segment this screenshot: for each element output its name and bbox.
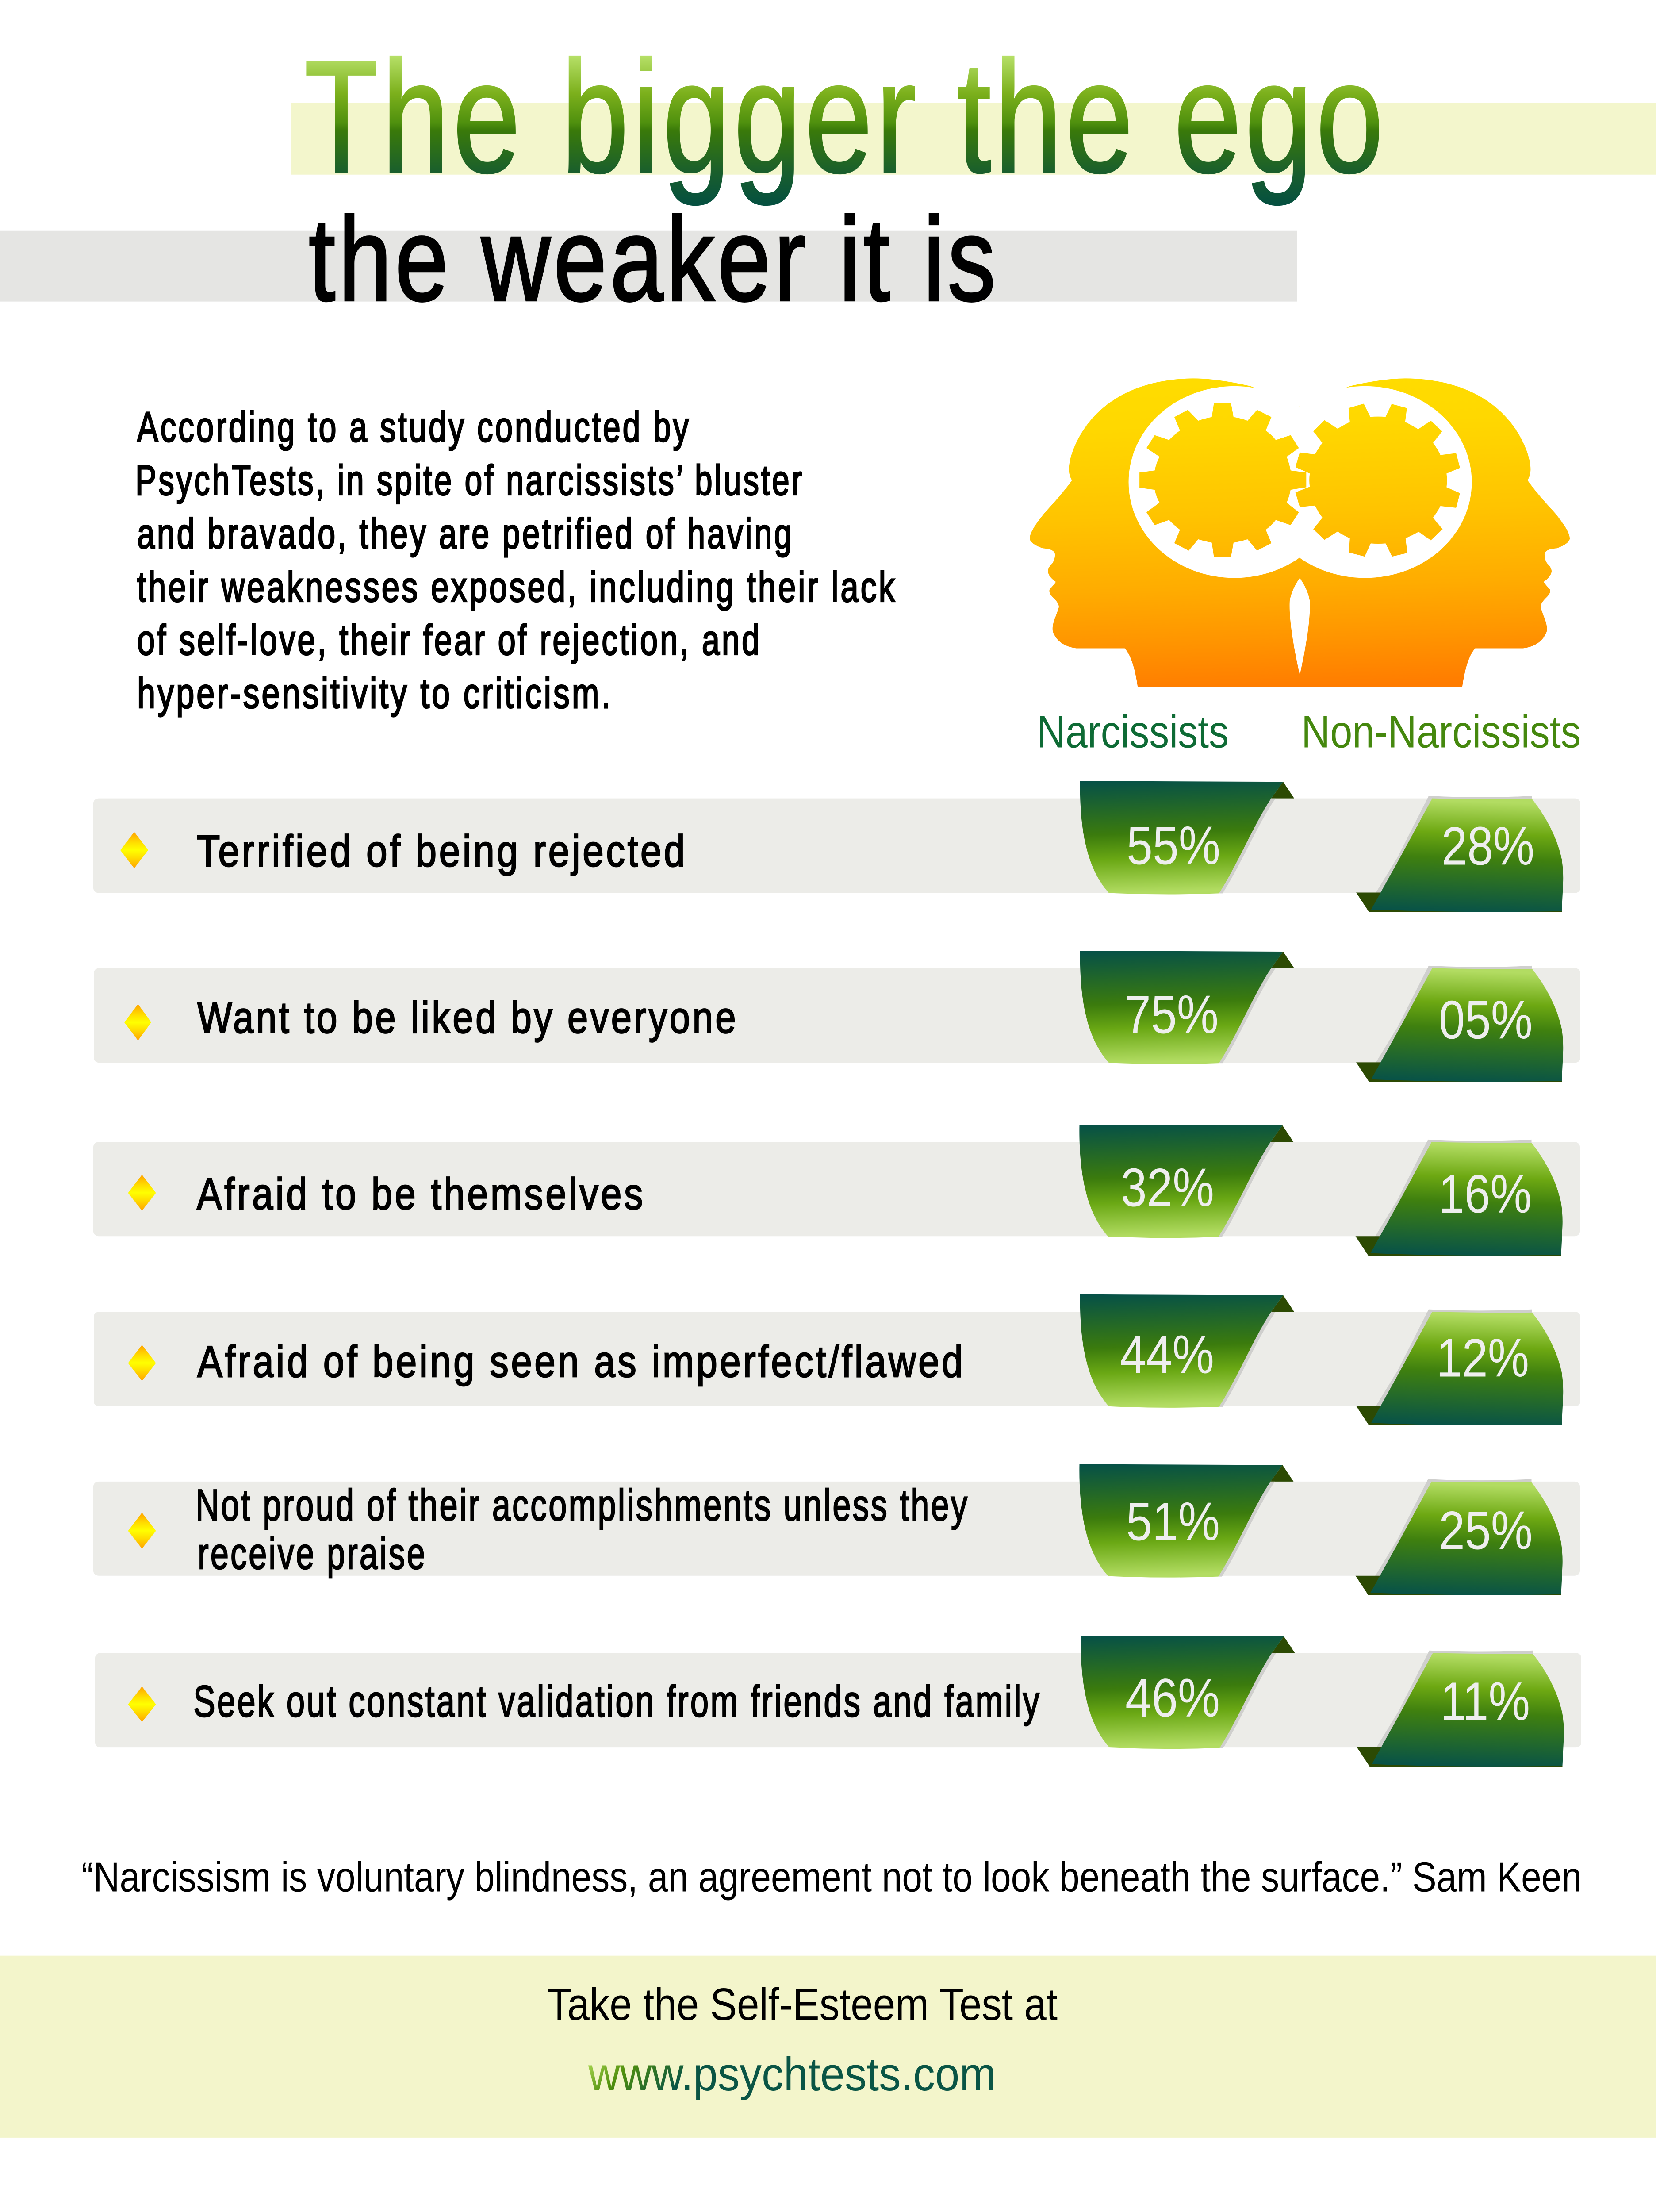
non-narcissists ribbon: 05% <box>1439 990 1533 1050</box>
row label: Want to be liked by everyone <box>197 993 738 1043</box>
non-narcissists ribbon: 25% <box>1439 1501 1533 1561</box>
narcissists ribbon: 55% <box>1127 816 1220 876</box>
row 4: Afraid of being seen as imperfect/flawed <box>94 1294 1580 1425</box>
narcissists ribbon <box>1079 1125 1293 1238</box>
narcissists ribbon: 32% <box>1121 1158 1214 1218</box>
row label: Afraid of being seen as imperfect/flawed <box>197 1337 965 1386</box>
diamond bullet <box>128 1686 156 1722</box>
intro paragraph: According to a study conducted by <box>137 403 691 451</box>
diamond bullet <box>128 1175 156 1211</box>
icon: two heads with interlocking gears <box>1030 378 1570 687</box>
non-narcissists ribbon: 11% <box>1440 1671 1530 1732</box>
non-narcissists ribbon: 16% <box>1438 1164 1532 1225</box>
intro paragraph: and bravado, they are petrified of having <box>137 510 794 557</box>
narcissists ribbon: 75% <box>1125 985 1219 1045</box>
row label: Terrified of being rejected <box>197 826 687 876</box>
intro paragraph: PsychTests, in spite of narcissists’ bluster <box>135 457 804 504</box>
narcissists ribbon <box>1080 951 1294 1064</box>
footer call to action: Take the Self-Esteem Test at <box>547 1978 1058 2030</box>
intro paragraph: their weaknesses exposed, including their lack <box>137 564 897 611</box>
title band: yellow highlight <box>291 103 1656 175</box>
row label, two lines: receive praise <box>198 1529 427 1578</box>
row label: Afraid to be themselves <box>197 1169 645 1219</box>
narcissists ribbon <box>1080 781 1294 894</box>
non-narcissists ribbon <box>1356 966 1563 1082</box>
non-narcissists ribbon <box>1355 1479 1563 1595</box>
narcissists ribbon <box>1081 1636 1295 1749</box>
narcissists ribbon <box>1079 1464 1293 1578</box>
intro paragraph: hyper-sensitivity to criticism. <box>137 670 613 717</box>
row label, two lines: Not proud of their accomplishments unless they <box>196 1481 969 1530</box>
non-narcissists ribbon <box>1356 796 1563 912</box>
non-narcissists ribbon <box>1355 1140 1563 1256</box>
non-narcissists ribbon <box>1357 1651 1564 1767</box>
column label: Non-Narcissists: Non-Narcissists <box>1301 706 1581 757</box>
row 3: Afraid to be themselves <box>93 1125 1580 1256</box>
footer band <box>0 1956 1656 2138</box>
row 1: Terrified of being rejected <box>93 781 1580 912</box>
non-narcissists ribbon <box>1356 1310 1563 1425</box>
row 6: Seek out constant validation from friends and family <box>95 1636 1581 1767</box>
column label: Narcissists: Narcissists <box>1037 706 1229 757</box>
narcissists ribbon: 51% <box>1126 1492 1220 1552</box>
narcissists ribbon: 46% <box>1125 1668 1220 1728</box>
row label: Seek out constant validation from friends and family <box>193 1677 1041 1726</box>
intro paragraph: of self-love, their fear of rejection, and <box>137 616 762 664</box>
non-narcissists ribbon: 12% <box>1436 1328 1529 1388</box>
row 5: Not proud of their accomplishments unless they receive praise <box>93 1464 1580 1595</box>
narcissists ribbon: 44% <box>1120 1325 1214 1385</box>
title band: grey highlight <box>0 231 1297 302</box>
narcissists ribbon <box>1080 1294 1294 1408</box>
diamond bullet <box>128 1345 156 1381</box>
footer url: www.psychtests.com <box>588 2048 996 2101</box>
intro paragraph <box>135 403 897 717</box>
row 2: Want to be liked by everyone <box>94 951 1580 1082</box>
non-narcissists ribbon: 28% <box>1441 816 1534 876</box>
diamond bullet <box>120 832 148 868</box>
diamond bullet <box>124 1004 151 1041</box>
diamond bullet <box>128 1513 156 1549</box>
row label, two lines <box>196 1481 969 1578</box>
title: second line: the weaker it is <box>309 193 999 326</box>
